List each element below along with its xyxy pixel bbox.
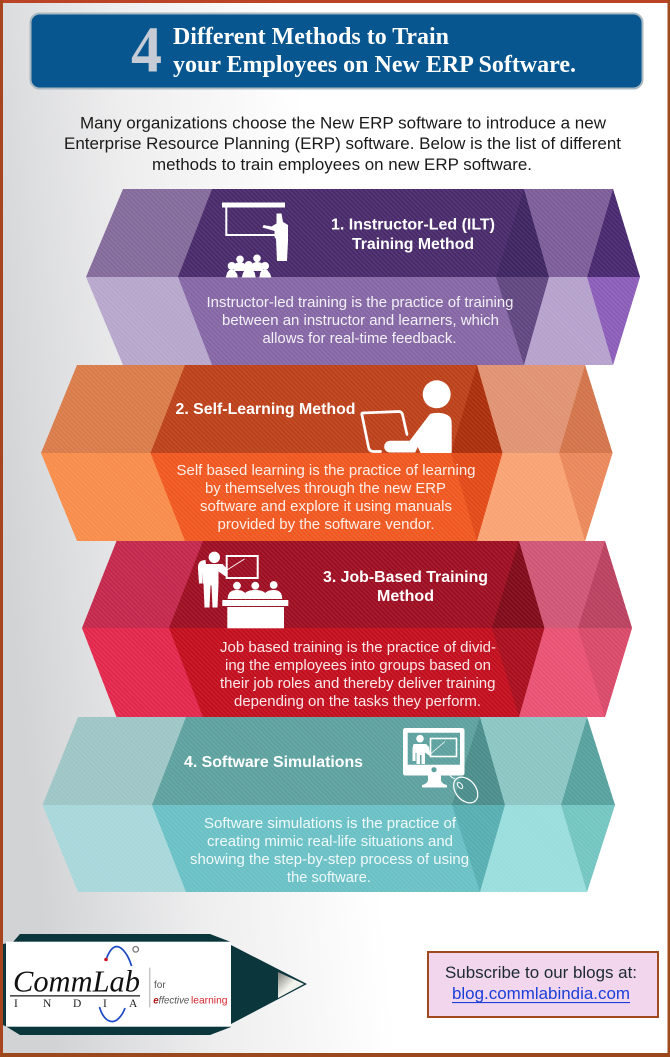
text: method 2 description: by themselves through the new ERP	[205, 481, 446, 497]
text: method 1 description: allows for real-time feedback.	[262, 331, 456, 347]
pencil logo	[3, 934, 307, 1035]
intro paragraph: Enterprise Resource Planning (ERP) software. Below is the list of different	[64, 134, 621, 153]
intro paragraph	[64, 114, 621, 174]
text: method 3 description: depending on the tasks they perform.	[234, 694, 481, 710]
heading: method 4: 4. Software Simulations	[184, 754, 363, 771]
intro paragraph: methods to train employees on new ERP software.	[152, 155, 532, 174]
logo mark: CommLab India	[10, 946, 228, 1022]
text: method 4 description: Software simulations is the practice of	[204, 816, 457, 832]
logo mark: CommLab India: learning	[191, 994, 228, 1006]
panel: method 1 instructor-led	[86, 189, 640, 365]
pencil tip	[278, 972, 304, 998]
text: method 1 description: between an instructor and learners, which	[222, 313, 499, 329]
header numeral: 4	[131, 14, 162, 87]
text: method 1 description	[206, 295, 514, 347]
text: method 1 description: Instructor-led training is the practice of training	[206, 295, 514, 311]
panel: method 4 software simulations	[42, 717, 615, 892]
icon: instructor and audience	[222, 202, 288, 278]
text: method 4 description: showing the step-by-step process of using	[190, 852, 469, 868]
text: method 4 description: the software.	[287, 870, 371, 886]
subscribe box: Subscribe to our blogs at:	[445, 964, 637, 982]
subscribe link: blog.commlabindia.com	[452, 985, 630, 1003]
text: method 2 description: provided by the software vendor.	[218, 517, 434, 533]
heading: method 3	[323, 569, 488, 605]
logo card	[6, 942, 231, 1027]
heading: method 3: 3. Job-Based Training	[323, 569, 488, 586]
icon: computer with mouse	[403, 728, 483, 808]
heading: method 1: Training Method	[352, 236, 474, 253]
text: method 4 description	[190, 816, 469, 886]
heading: method 2: 2. Self-Learning Method	[176, 401, 356, 418]
subscribe box	[428, 952, 658, 1017]
icon: person at laptop	[362, 380, 452, 453]
heading: method 3: Method	[377, 588, 434, 605]
text: method 2 description	[176, 463, 476, 533]
text: method 2 description: software and explore it using manuals	[200, 499, 452, 515]
pencil body	[3, 934, 307, 1035]
panel: method 2 self-learning	[41, 365, 612, 541]
heading: method 1: 1. Instructor-Led (ILT)	[331, 216, 495, 234]
header title: Different Methods to Train	[173, 24, 449, 50]
logo mark: CommLab India: CommLab	[13, 964, 140, 999]
intro paragraph: Many organizations choose the New ERP software to introduce a new	[80, 114, 607, 132]
header title	[173, 24, 576, 78]
icon: trainer with class at desk	[198, 552, 288, 628]
header title: your Employees on New ERP Software.	[173, 52, 576, 78]
logo mark: CommLab India: for	[154, 980, 166, 991]
logo mark: CommLab India: INDIA	[14, 998, 138, 1010]
text: method 3 description: ing the employees into groups based on	[225, 658, 491, 674]
text: method 3 description	[220, 640, 496, 710]
text: method 4 description: creating mimic real-life situations and	[207, 834, 453, 850]
text: method 3 description: their job roles and thereby deliver training	[220, 676, 496, 692]
text: method 3 description: Job based training is the practice of divid-	[220, 640, 496, 656]
header banner	[30, 14, 642, 88]
text: method 2 description: Self based learning is the practice of learning	[176, 463, 476, 479]
panel: method 3 job-based	[82, 541, 632, 717]
logo mark: CommLab India: effective	[153, 994, 189, 1006]
heading: method 1	[331, 216, 495, 253]
